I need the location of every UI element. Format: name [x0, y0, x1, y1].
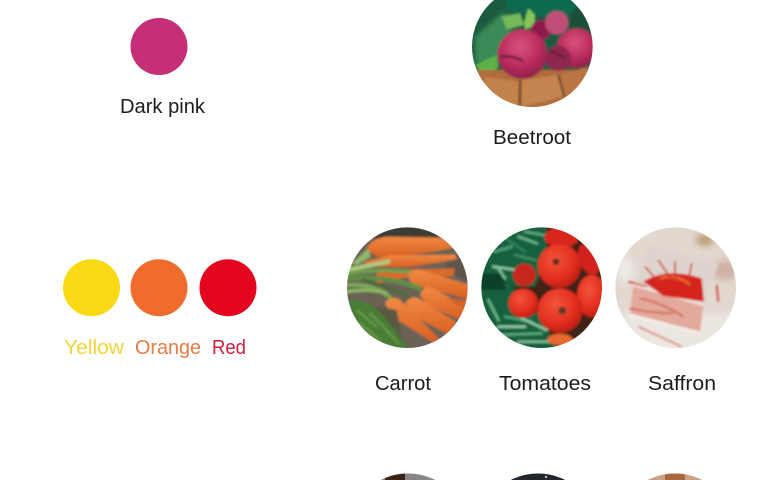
photo: carrot	[347, 227, 468, 348]
label: dark pink: Dark pink	[120, 96, 206, 118]
label: yellow: Yellow	[64, 337, 125, 359]
colour swatch: orange	[130, 259, 188, 316]
colour swatch: yellow	[63, 259, 120, 316]
label: tomatoes: Tomatoes	[499, 373, 591, 395]
label: red: Red	[212, 337, 246, 359]
label: orange: Orange	[135, 337, 201, 359]
photo: tomatoes	[481, 227, 602, 348]
label: carrot: Carrot	[375, 373, 431, 395]
colour swatch: red	[200, 259, 256, 316]
photo: bottom right (cropped)	[648, 474, 702, 480]
photo: bottom left (cropped)	[380, 474, 436, 480]
photo: bottom centre (cropped)	[510, 474, 566, 480]
label: beetroot: Beetroot	[493, 127, 571, 149]
photo: beetroot	[472, 0, 593, 107]
colour swatch: dark pink	[130, 18, 188, 75]
photo: saffron	[615, 227, 736, 348]
label: saffron: Saffron	[648, 373, 716, 395]
